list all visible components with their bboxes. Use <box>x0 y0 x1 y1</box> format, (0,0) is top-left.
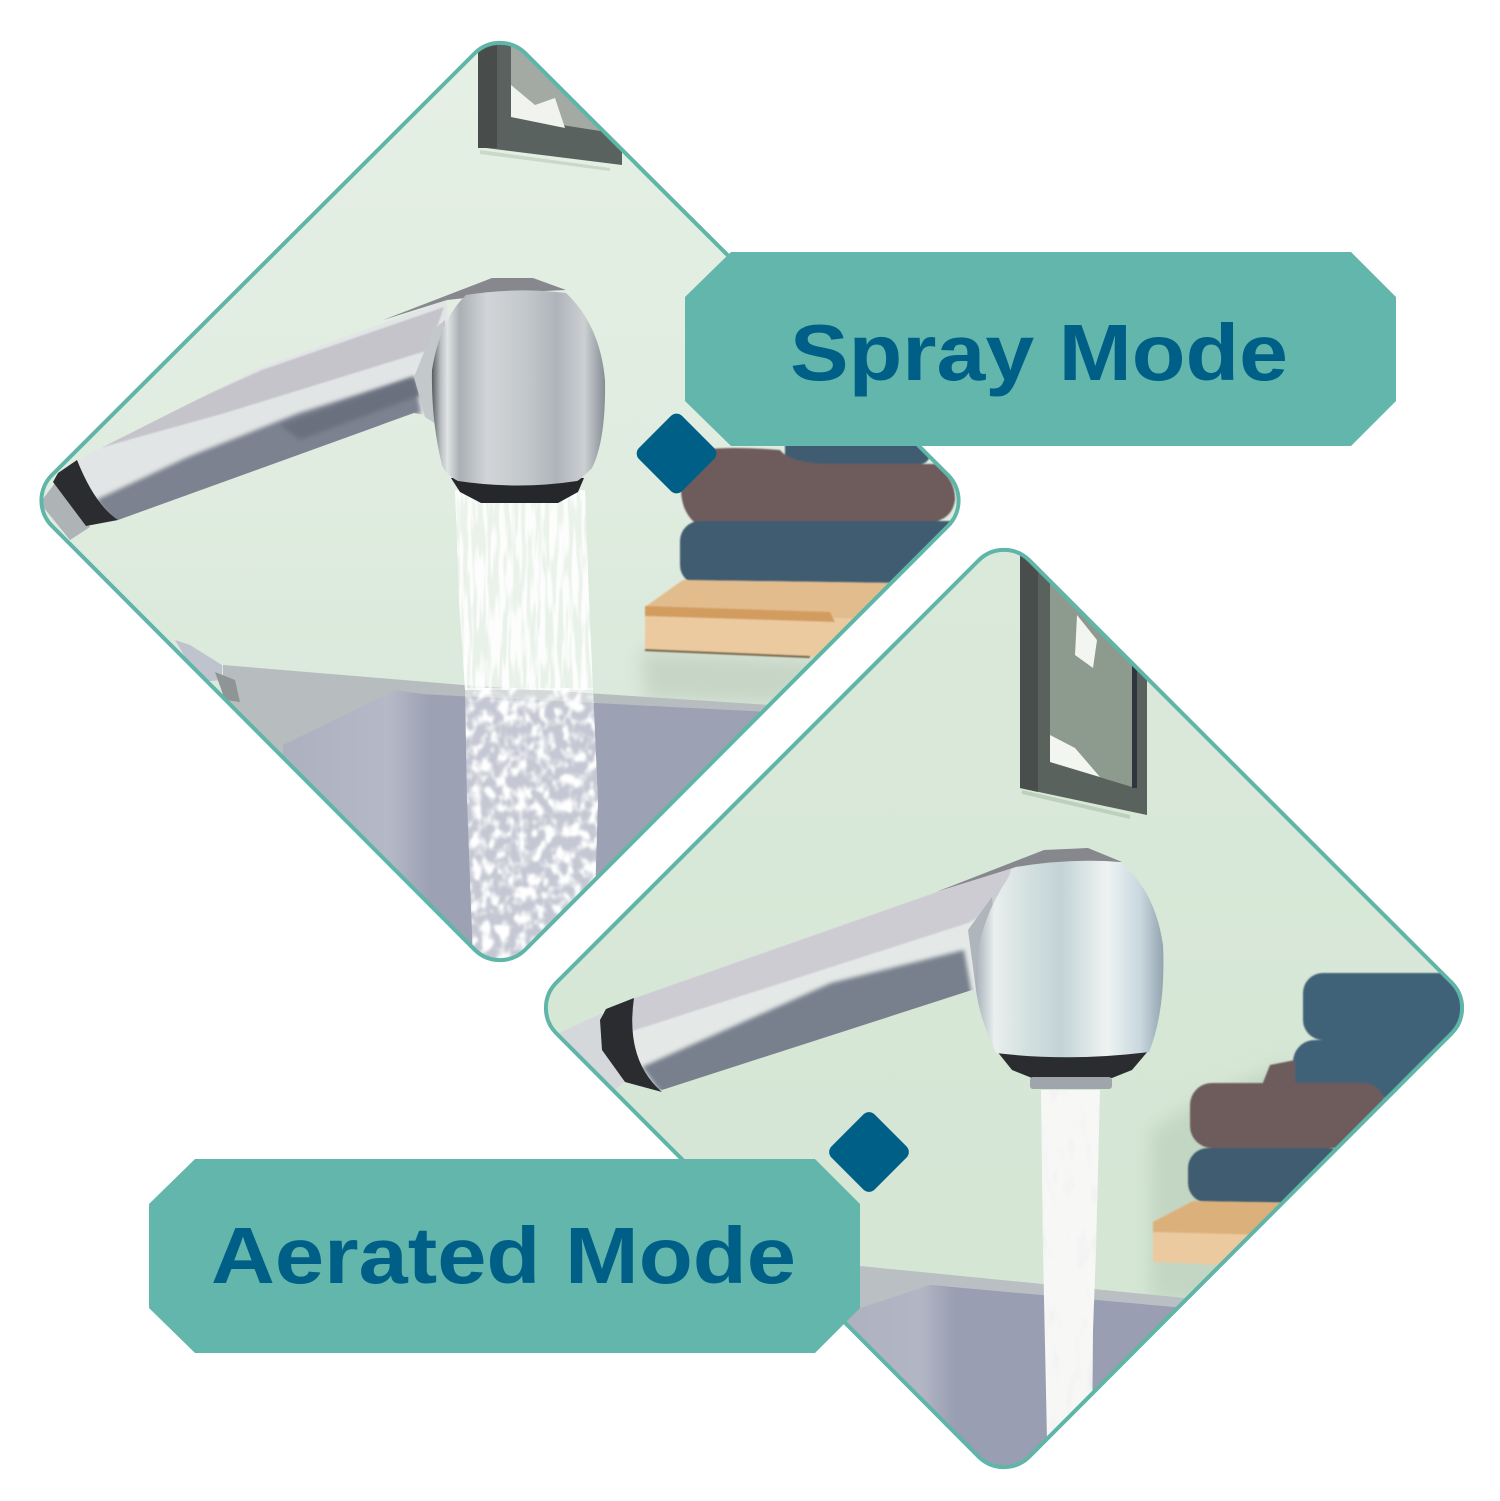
faucet head cap <box>383 278 566 320</box>
wooden shelf <box>645 580 900 660</box>
faucet head <box>432 290 605 486</box>
faucet neck <box>968 897 992 990</box>
faucet left stub <box>559 1013 624 1090</box>
faucet left stub <box>40 483 90 540</box>
photo wall <box>548 552 1440 1298</box>
photo wall <box>44 53 956 705</box>
panel: aerated mode photo <box>531 535 1483 1482</box>
faucet nozzle <box>996 1050 1149 1078</box>
panel border <box>41 43 959 960</box>
faucet nozzle <box>451 478 584 503</box>
sink <box>175 640 770 990</box>
towel stack <box>679 446 956 584</box>
label: spray mode <box>685 252 1396 446</box>
wooden shelf <box>1152 1200 1281 1266</box>
faucet black ring <box>600 998 662 1092</box>
shelf shadow on wall <box>639 652 812 704</box>
decorative marker: spray <box>633 410 720 497</box>
label: spray mode: Spray Mode <box>790 308 1288 397</box>
towel stack <box>1188 973 1483 1203</box>
label: aerated mode <box>149 1159 860 1353</box>
aerator ring <box>1030 1077 1112 1089</box>
panel border <box>546 550 1462 1467</box>
picture frame <box>1020 540 1147 819</box>
decorative marker: aerated <box>826 1109 912 1195</box>
faucet black ring <box>53 460 118 526</box>
panel: spray mode photo <box>27 28 973 990</box>
faucet head cap <box>936 848 1122 892</box>
faucet arm <box>602 868 1012 1090</box>
faucet head <box>976 861 1163 1057</box>
wall shadow near shelf <box>1148 1068 1267 1298</box>
picture frame <box>478 44 622 171</box>
sink <box>840 1265 1185 1480</box>
faucet neck <box>414 320 445 430</box>
label: aerated mode: Aerated Mode <box>211 1211 796 1300</box>
aerated water stream <box>1041 1090 1100 1436</box>
water spray stream <box>450 490 605 965</box>
faucet arm <box>96 300 448 520</box>
